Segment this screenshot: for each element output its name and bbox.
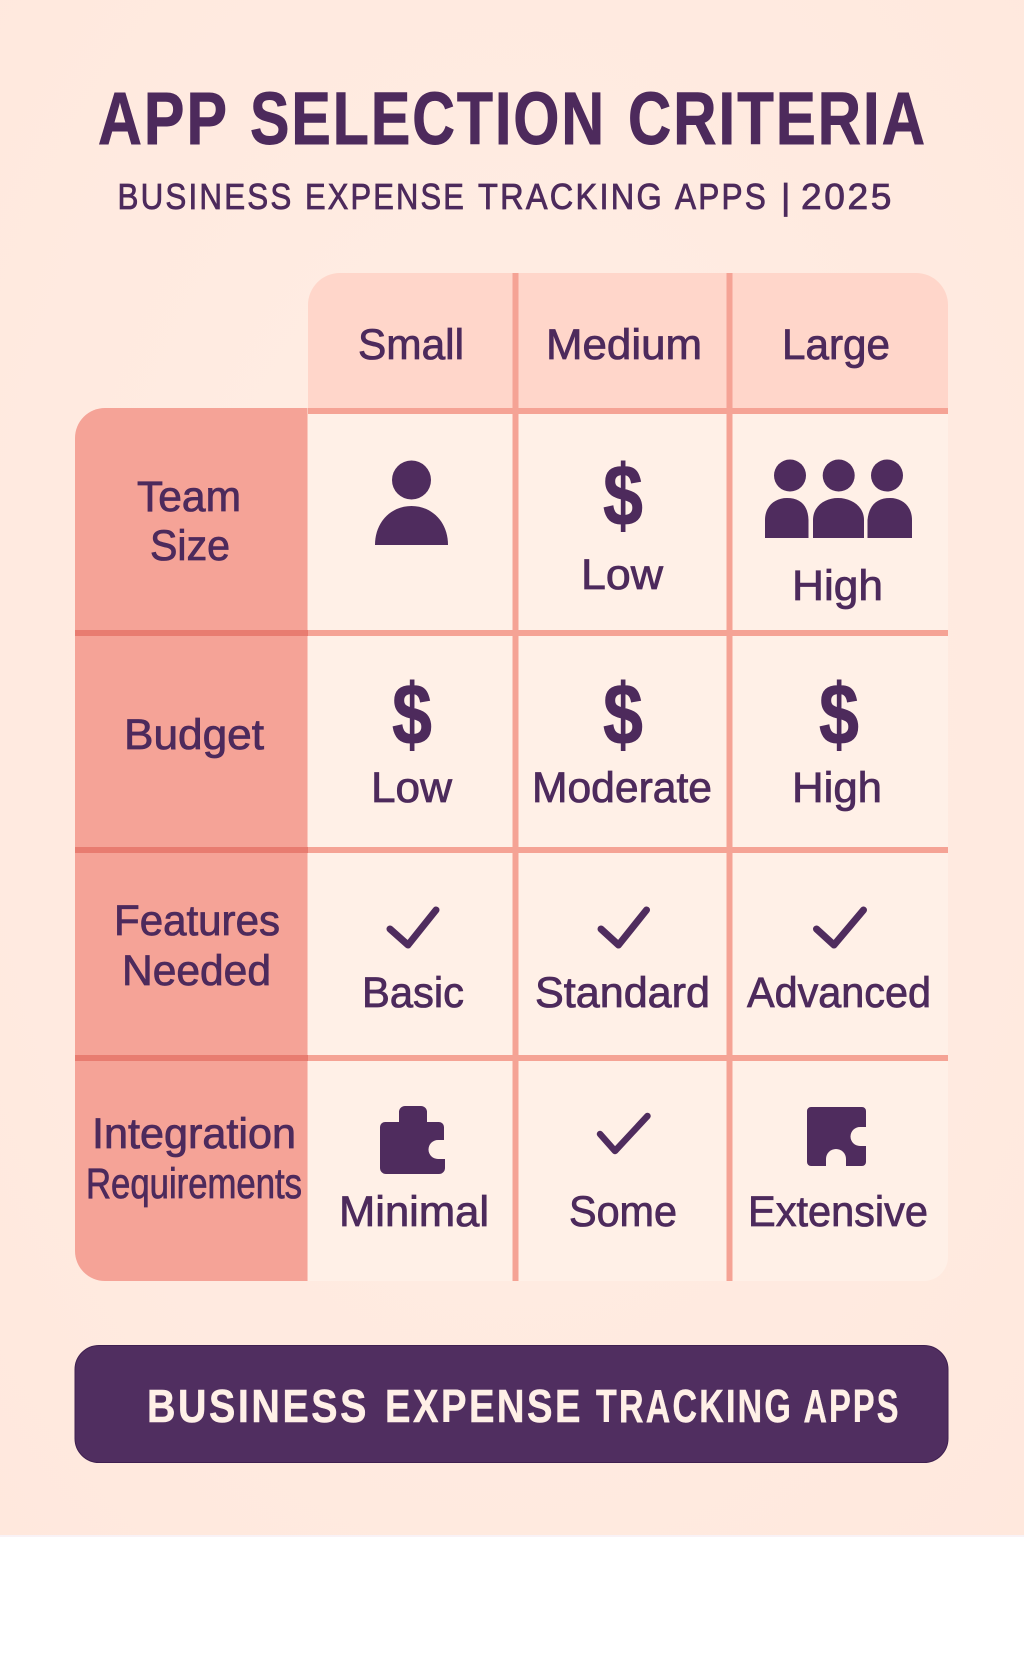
panel: row header column bbox=[75, 408, 308, 1281]
row heading: Integration Requirements bbox=[86, 1110, 302, 1208]
column heading: Large: Large bbox=[782, 321, 890, 369]
footer banner bbox=[75, 1346, 948, 1462]
subtitle: BUSINESS bbox=[118, 176, 294, 217]
row heading: Integration Requirements: Integration bbox=[92, 1110, 296, 1158]
label: High, team size large: High bbox=[792, 562, 883, 610]
icon: check, basic bbox=[390, 910, 436, 945]
label: Extensive: Extensive bbox=[748, 1188, 928, 1236]
label: Low, budget small: Low bbox=[371, 764, 453, 812]
title: SELECTION bbox=[250, 77, 606, 160]
row heading: Integration Requirements: Requirements bbox=[86, 1160, 302, 1208]
column heading: Medium: Medium bbox=[546, 321, 702, 369]
title: APP bbox=[98, 77, 229, 160]
icon: check, standard bbox=[601, 910, 646, 945]
icon: dollar sign, budget medium: $ bbox=[603, 666, 643, 762]
label: Moderate: Moderate bbox=[532, 764, 712, 812]
row heading: Team Size: Team bbox=[137, 473, 241, 521]
subtitle: | bbox=[781, 176, 793, 217]
footer banner text: APPS bbox=[804, 1380, 900, 1432]
row heading: Budget: Budget bbox=[124, 711, 264, 759]
subtitle bbox=[118, 176, 894, 217]
row heading: Team Size: Size bbox=[150, 522, 230, 570]
icon: puzzle piece, extensive bbox=[807, 1107, 866, 1166]
footer banner text bbox=[147, 1380, 900, 1432]
icon: dollar sign, team size medium: $ bbox=[603, 447, 643, 543]
label: Some: Some bbox=[569, 1188, 677, 1236]
icon: group of three people bbox=[765, 460, 912, 538]
label: Advanced: Advanced bbox=[747, 969, 931, 1017]
title bbox=[98, 77, 927, 160]
footer banner text: BUSINESS bbox=[147, 1380, 369, 1432]
row heading: Features Needed: Needed bbox=[122, 947, 271, 995]
panel: comparison table bbox=[75, 273, 948, 1281]
icon: puzzle piece, minimal bbox=[380, 1106, 445, 1174]
icon: single person bbox=[375, 460, 448, 545]
icon: dollar sign, budget large: $ bbox=[819, 666, 859, 762]
row heading: Features Needed: Features bbox=[114, 897, 280, 945]
icon: dollar sign, budget small: $ bbox=[392, 666, 432, 762]
footer banner text: EXPENSE bbox=[385, 1380, 583, 1432]
label: Minimal: Minimal bbox=[339, 1188, 489, 1236]
panel: table cells bbox=[308, 408, 948, 1281]
label: Standard: Standard bbox=[535, 969, 710, 1017]
label: Basic: Basic bbox=[362, 969, 464, 1017]
panel: column header band bbox=[308, 273, 948, 408]
subtitle: TRACKING bbox=[478, 176, 664, 217]
label: Low, team size medium: Low bbox=[581, 551, 664, 599]
subtitle: EXPENSE bbox=[305, 176, 466, 217]
label: High, budget large: High bbox=[792, 764, 882, 812]
icon: check, some bbox=[600, 1116, 648, 1151]
icon: check, advanced bbox=[816, 910, 864, 945]
footer banner text: TRACKING bbox=[596, 1380, 793, 1432]
subtitle: APPS bbox=[675, 176, 768, 217]
row heading: Features Needed bbox=[114, 897, 280, 995]
title: CRITERIA bbox=[628, 77, 927, 160]
column heading: Small: Small bbox=[358, 321, 464, 369]
row heading: Team Size bbox=[137, 473, 241, 570]
subtitle: 2025 bbox=[801, 176, 894, 217]
